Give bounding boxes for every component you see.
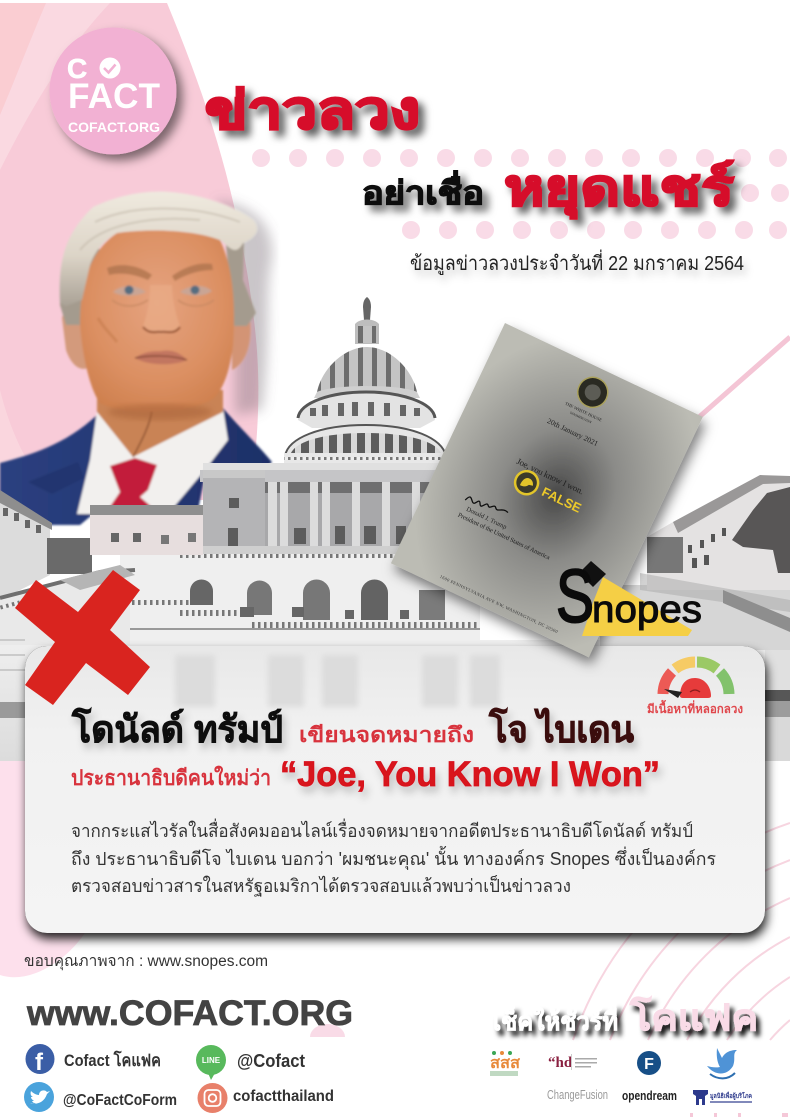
letter: header and date <box>515 393 615 496</box>
letter: header and date: WASHINGTON <box>569 411 593 425</box>
partner: ThaiHealth <box>490 1051 520 1076</box>
decorative pink marks along bottom edge <box>690 1113 788 1117</box>
image credit: ขอบคุณภาพจาก : www.snopes.com <box>24 953 268 971</box>
decorative pink arcs <box>573 823 790 1040</box>
card: body paragraph: ตรวจสอบข่าวสารในสหรัฐอเมริกาได้ตรวจสอบแล้วพบว่าเป็นข่าวลวง <box>71 874 571 897</box>
letter: signature block: President of the United States of America <box>457 512 551 561</box>
portrait: face <box>80 230 234 412</box>
illustration: big red cross <box>15 570 150 705</box>
logo: CoFact badge <box>50 28 176 154</box>
logo: Snopes: S <box>556 554 594 638</box>
decorative pink half circle under url <box>310 1024 345 1037</box>
portrait: suit <box>0 408 272 525</box>
slogan: check with Cofact <box>493 996 758 1038</box>
portrait: nose <box>143 285 180 334</box>
social: Facebook: f <box>35 1049 44 1076</box>
portrait: eyes and brows <box>107 264 214 306</box>
social: Instagram <box>198 1083 334 1113</box>
social: Facebook <box>26 1044 161 1076</box>
letter: signature <box>465 493 508 519</box>
letter: header and date: Joe, you know I won. <box>515 456 585 496</box>
card: headline line one: โจ ไบเดน <box>488 707 634 750</box>
logo: CoFact badge: COFACT.ORG <box>68 119 160 135</box>
capitol: arcade level <box>120 554 480 644</box>
illustration: rated letter from The White House <box>391 323 703 657</box>
capitol: left wing <box>0 490 203 718</box>
partner: ChangeFusion: ChangeFusion <box>547 1087 608 1102</box>
panel: pink curved background shape <box>0 3 258 977</box>
partner: Centre for Humanitarian Dialogue: “hd <box>548 1055 573 1071</box>
letter: footer address: 1600 PENNSYLVANIA AVE NW, WASHINGTON, DC 20500 <box>439 574 559 635</box>
website url: www.COFACT.ORG <box>26 994 353 1033</box>
portrait: neck <box>97 390 223 457</box>
card: headline line one: เขียนจดหมายถึง <box>299 723 474 747</box>
partner: Centre for Humanitarian Dialogue <box>548 1054 597 1071</box>
heading: do not believe: อย่าเชื่อ <box>362 170 484 211</box>
heading: stop sharing: หยุดแชร์ <box>504 160 734 219</box>
social: Twitter: @CoFactCoForm <box>63 1092 177 1109</box>
slogan: check with Cofact: เช็คให้ชัวร์ที่ <box>493 1004 618 1036</box>
panel: main text card <box>25 646 765 933</box>
card: headline line two: “Joe, You Know I Won” <box>280 755 660 794</box>
card: headline line two <box>71 755 660 794</box>
portrait: necktie <box>105 458 160 514</box>
card: misleading content gauge <box>647 662 743 716</box>
social: LINE <box>196 1045 305 1080</box>
partner: Foundation for Consumers: มูลนิธิเพื่อผู้บริโภค <box>710 1090 752 1101</box>
social: LINE: @Cofact <box>237 1051 305 1071</box>
partner: opendream: opendream <box>622 1088 677 1103</box>
card: body paragraph: จากกระแสไวรัลในสื่อสังคมออนไลน์เรื่องจดหมายจากอดีตประธานาธิบดีโดนัลด์ ทรัมป์ <box>71 818 693 841</box>
logo: CoFact badge: FACT <box>68 77 160 116</box>
slogan: check with Cofact: โคแฟค <box>629 996 758 1038</box>
portrait: mouth <box>98 318 187 364</box>
capitol: central block <box>196 463 466 554</box>
card: body paragraph <box>71 818 716 897</box>
card: misleading content gauge: มีเนื้อหาที่หลอกลวง <box>647 699 743 716</box>
card: faint building arches <box>175 655 500 707</box>
card: headline line one <box>71 707 634 750</box>
logo: Snopes: nopes <box>592 589 702 631</box>
portrait: lapel <box>28 462 84 494</box>
social: Instagram: cofactthailand <box>233 1088 334 1105</box>
portrait: neck crease <box>133 410 152 457</box>
card: headline line one: โดนัลด์ ทรัมป์ <box>71 707 283 750</box>
card: body paragraph: ถึง ประธานาธิบดีโจ ไบเดน บอกว่า 'ผมชนะคุณ' นั้น ทางองค์กร Snopes ซึ่งเป็นองค์กร <box>71 846 716 870</box>
partner logos <box>490 1048 752 1105</box>
social: Facebook: Cofact โคแฟค <box>64 1050 161 1070</box>
partner: Foundation for Consumers <box>693 1090 752 1105</box>
letter: signature block: Donald J. Trump <box>465 506 508 531</box>
portrait: shirt collar <box>77 408 228 514</box>
date line: ข้อมูลข่าวลวงประจำวันที่ 22 มกราคม 2564 <box>410 249 744 276</box>
social: Twitter <box>24 1082 177 1112</box>
capitol: dome <box>284 297 448 463</box>
letter: false rating stamp: FALSE <box>539 484 584 516</box>
portrait: hair streaks <box>80 208 240 250</box>
pink diagonal line <box>690 337 790 425</box>
partner: ThaiHealth: สสส <box>490 1055 520 1072</box>
letter: presidential seal <box>573 372 613 412</box>
portrait: under-chin shadow <box>108 404 212 420</box>
card: headline line two: ประธานาธิบดีคนใหม่ว่า <box>71 765 271 790</box>
social: LINE: LINE <box>202 1056 221 1065</box>
decorative dot pattern behind heading <box>252 149 789 239</box>
heading: fake news: ข่าวลวง <box>205 82 420 140</box>
letter: header and date: 20th January 2021 <box>546 416 600 448</box>
capitol: right wing <box>600 475 790 761</box>
portrait: ears <box>62 310 88 369</box>
letter: header and date: THE WHITE HOUSE <box>564 401 603 423</box>
portrait: hair sides <box>60 225 256 326</box>
portrait: hair <box>60 192 257 306</box>
logo: CoFact badge: C <box>67 53 87 84</box>
illustration: US Capitol building <box>0 297 790 761</box>
letter: false rating stamp <box>511 467 586 519</box>
partner: round F logo: F <box>644 1056 654 1073</box>
partner: blue dove <box>707 1048 737 1078</box>
illustration: portrait of Donald Trump <box>0 192 272 525</box>
portrait: shadow halo <box>215 200 272 415</box>
logo: Snopes <box>556 554 702 638</box>
partner: round F logo <box>637 1051 661 1075</box>
